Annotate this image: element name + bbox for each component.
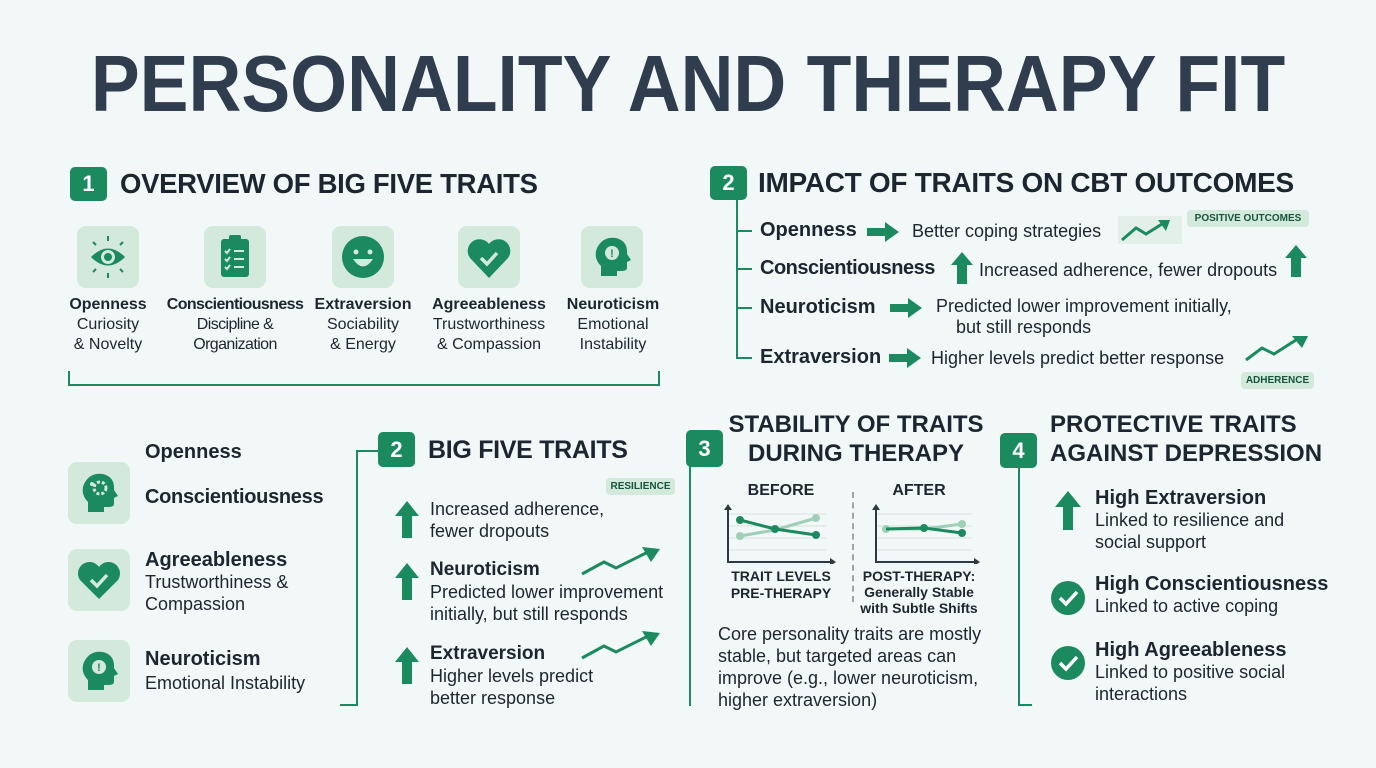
- panel: big five traits section 2: [378, 432, 675, 708]
- bracket: [356, 450, 358, 706]
- panel: protective traits: social support: [1095, 532, 1206, 552]
- trait labels: Instability: [580, 336, 646, 353]
- trait labels: Extraversion: [315, 296, 411, 313]
- icon: clipboard: [204, 226, 266, 288]
- panel: impact of traits on CBT outcomes: Higher levels predict better response: [931, 348, 1224, 368]
- heading: BIG FIVE TRAITS: [428, 436, 628, 464]
- badge 3: [686, 430, 723, 467]
- chart: after: Generally Stable: [864, 584, 974, 600]
- panel: impact of traits on CBT outcomes: Extraversion: [760, 346, 881, 368]
- panel: protective traits: [1000, 411, 1328, 706]
- badge 1: [70, 167, 107, 201]
- chart: before: [724, 482, 836, 601]
- panel: overview of big five traits: [68, 167, 660, 386]
- icon: head: [581, 226, 643, 288]
- icon: check 2: [1051, 646, 1085, 680]
- rows: Openness: [760, 219, 857, 241]
- panel: big five traits section 2: Extraversion: [430, 643, 545, 664]
- panel: bottom left traits: Openness: [145, 441, 242, 463]
- icon: smiley: [332, 226, 394, 288]
- panel: bottom left traits: Conscientiousness: [145, 486, 323, 508]
- badge 1: 1: [82, 171, 95, 196]
- panel: protective traits: Linked to positive social: [1095, 662, 1285, 682]
- chart: before: PRE-THERAPY: [731, 585, 831, 601]
- icon: eye: [77, 226, 139, 288]
- icon: head: !: [610, 248, 614, 260]
- heading 3: [728, 411, 984, 467]
- heading 4: [1050, 411, 1322, 467]
- panel: protective traits: High Agreeableness: [1095, 639, 1287, 661]
- badge 2b: [378, 432, 415, 467]
- icon: head gear: [68, 462, 130, 524]
- chart: after: with Subtle Shifts: [860, 600, 978, 616]
- panel: big five traits section 2: better response: [430, 688, 555, 708]
- icon: check 1: [1051, 581, 1085, 615]
- chart: after: [860, 482, 980, 616]
- badge 2b: 2: [390, 436, 403, 462]
- panel: bottom left traits: Neuroticism: [145, 648, 261, 670]
- panel: bottom left traits: Agreeableness: [145, 549, 287, 571]
- trait labels: Organization: [193, 336, 277, 353]
- panel: impact of traits on CBT outcomes: but still responds: [956, 317, 1091, 337]
- chart: after: POST-THERAPY:: [863, 568, 975, 584]
- heading 3: STABILITY OF TRAITS: [728, 411, 984, 438]
- badge 2: [710, 166, 747, 200]
- panel: protective traits: Linked to active coping: [1095, 596, 1278, 616]
- body text: [718, 624, 982, 710]
- badge 4: 4: [1012, 438, 1025, 462]
- panel: impact of traits on CBT outcomes: [710, 166, 1314, 389]
- panel: impact of traits on CBT outcomes: Better coping strategies: [912, 221, 1101, 241]
- heading 2: IMPACT OF TRAITS ON CBT OUTCOMES: [758, 167, 1294, 198]
- body text: stable, but targeted areas can: [718, 646, 956, 666]
- trait labels: Discipline &: [197, 316, 273, 333]
- icon: head neuroticism: !: [97, 662, 101, 674]
- icon: heart check: [458, 226, 520, 288]
- panel: protective traits: interactions: [1095, 684, 1187, 704]
- trait labels: Sociability: [327, 316, 399, 333]
- body text: higher extraversion): [718, 690, 877, 710]
- trait labels: & Energy: [330, 336, 396, 353]
- panel: big five traits section 2: RESILIENCE: [610, 481, 670, 492]
- icon: heart: [68, 549, 130, 611]
- trait labels: Emotional: [577, 316, 649, 333]
- trait labels: & Compassion: [437, 336, 541, 353]
- panel: big five traits section 2: Increased adherence,: [430, 499, 604, 519]
- trait labels: [69, 296, 659, 353]
- panel: protective traits: Linked to resilience and: [1095, 510, 1284, 530]
- panel: bottom left traits: [68, 441, 378, 706]
- trait labels: Openness: [69, 296, 147, 313]
- panel: big five traits section 2: Predicted lower improvement: [430, 582, 663, 602]
- panel: impact of traits on CBT outcomes: Neuroticism: [760, 296, 876, 318]
- badge 3: 3: [698, 436, 711, 460]
- chart: after: AFTER: [892, 482, 946, 499]
- panel: big five traits section 2: fewer dropouts: [430, 521, 549, 541]
- panel: protective traits: High Extraversion: [1095, 487, 1266, 509]
- trait labels: Conscientiousness: [167, 296, 303, 313]
- trait labels: & Novelty: [74, 336, 142, 353]
- panel: impact of traits on CBT outcomes: ADHERENCE: [1246, 375, 1309, 386]
- heading 4: AGAINST DEPRESSION: [1050, 440, 1322, 467]
- panel: impact of traits on CBT outcomes: Conscientiousness: [760, 257, 935, 279]
- panel: stability of traits: [686, 411, 984, 710]
- trait labels: Agreeableness: [432, 296, 546, 313]
- panel: bottom left traits: Emotional Instability: [145, 673, 305, 693]
- panel: protective traits: High Conscientiousness: [1095, 573, 1328, 595]
- icon: head neuroticism: [68, 640, 130, 702]
- chart: before: TRAIT LEVELS: [731, 568, 831, 584]
- panel: impact of traits on CBT outcomes: Increased adherence, fewer dropouts: [979, 260, 1277, 280]
- heading 3: DURING THERAPY: [748, 440, 964, 467]
- panel: big five traits section 2: Neuroticism: [430, 559, 540, 580]
- panel: impact of traits on CBT outcomes: POSITIVE OUTCOMES: [1195, 213, 1301, 224]
- trait labels: Curiosity: [77, 316, 139, 333]
- badge 2: 2: [722, 170, 735, 195]
- badge 4: [1000, 433, 1037, 468]
- panel: impact of traits on CBT outcomes: Predicted lower improvement initially,: [936, 296, 1232, 316]
- panel: big five traits section 2: Higher levels predict: [430, 666, 593, 686]
- heading 1: OVERVIEW OF BIG FIVE TRAITS: [120, 168, 538, 199]
- title: PERSONALITY AND THERAPY FIT: [91, 39, 1285, 128]
- trait labels: Trustworthiness: [433, 316, 545, 333]
- body text: improve (e.g., lower neuroticism,: [718, 668, 978, 688]
- heading 4: PROTECTIVE TRAITS: [1050, 411, 1297, 438]
- panel: big five traits section 2: initially, but still responds: [430, 604, 628, 624]
- trait labels: Neuroticism: [567, 296, 659, 313]
- panel: bottom left traits: Compassion: [145, 594, 245, 614]
- bracket: [68, 384, 660, 386]
- chart: before: BEFORE: [748, 482, 814, 499]
- body text: Core personality traits are mostly: [718, 624, 981, 644]
- panel: bottom left traits: Trustworthiness &: [145, 572, 288, 592]
